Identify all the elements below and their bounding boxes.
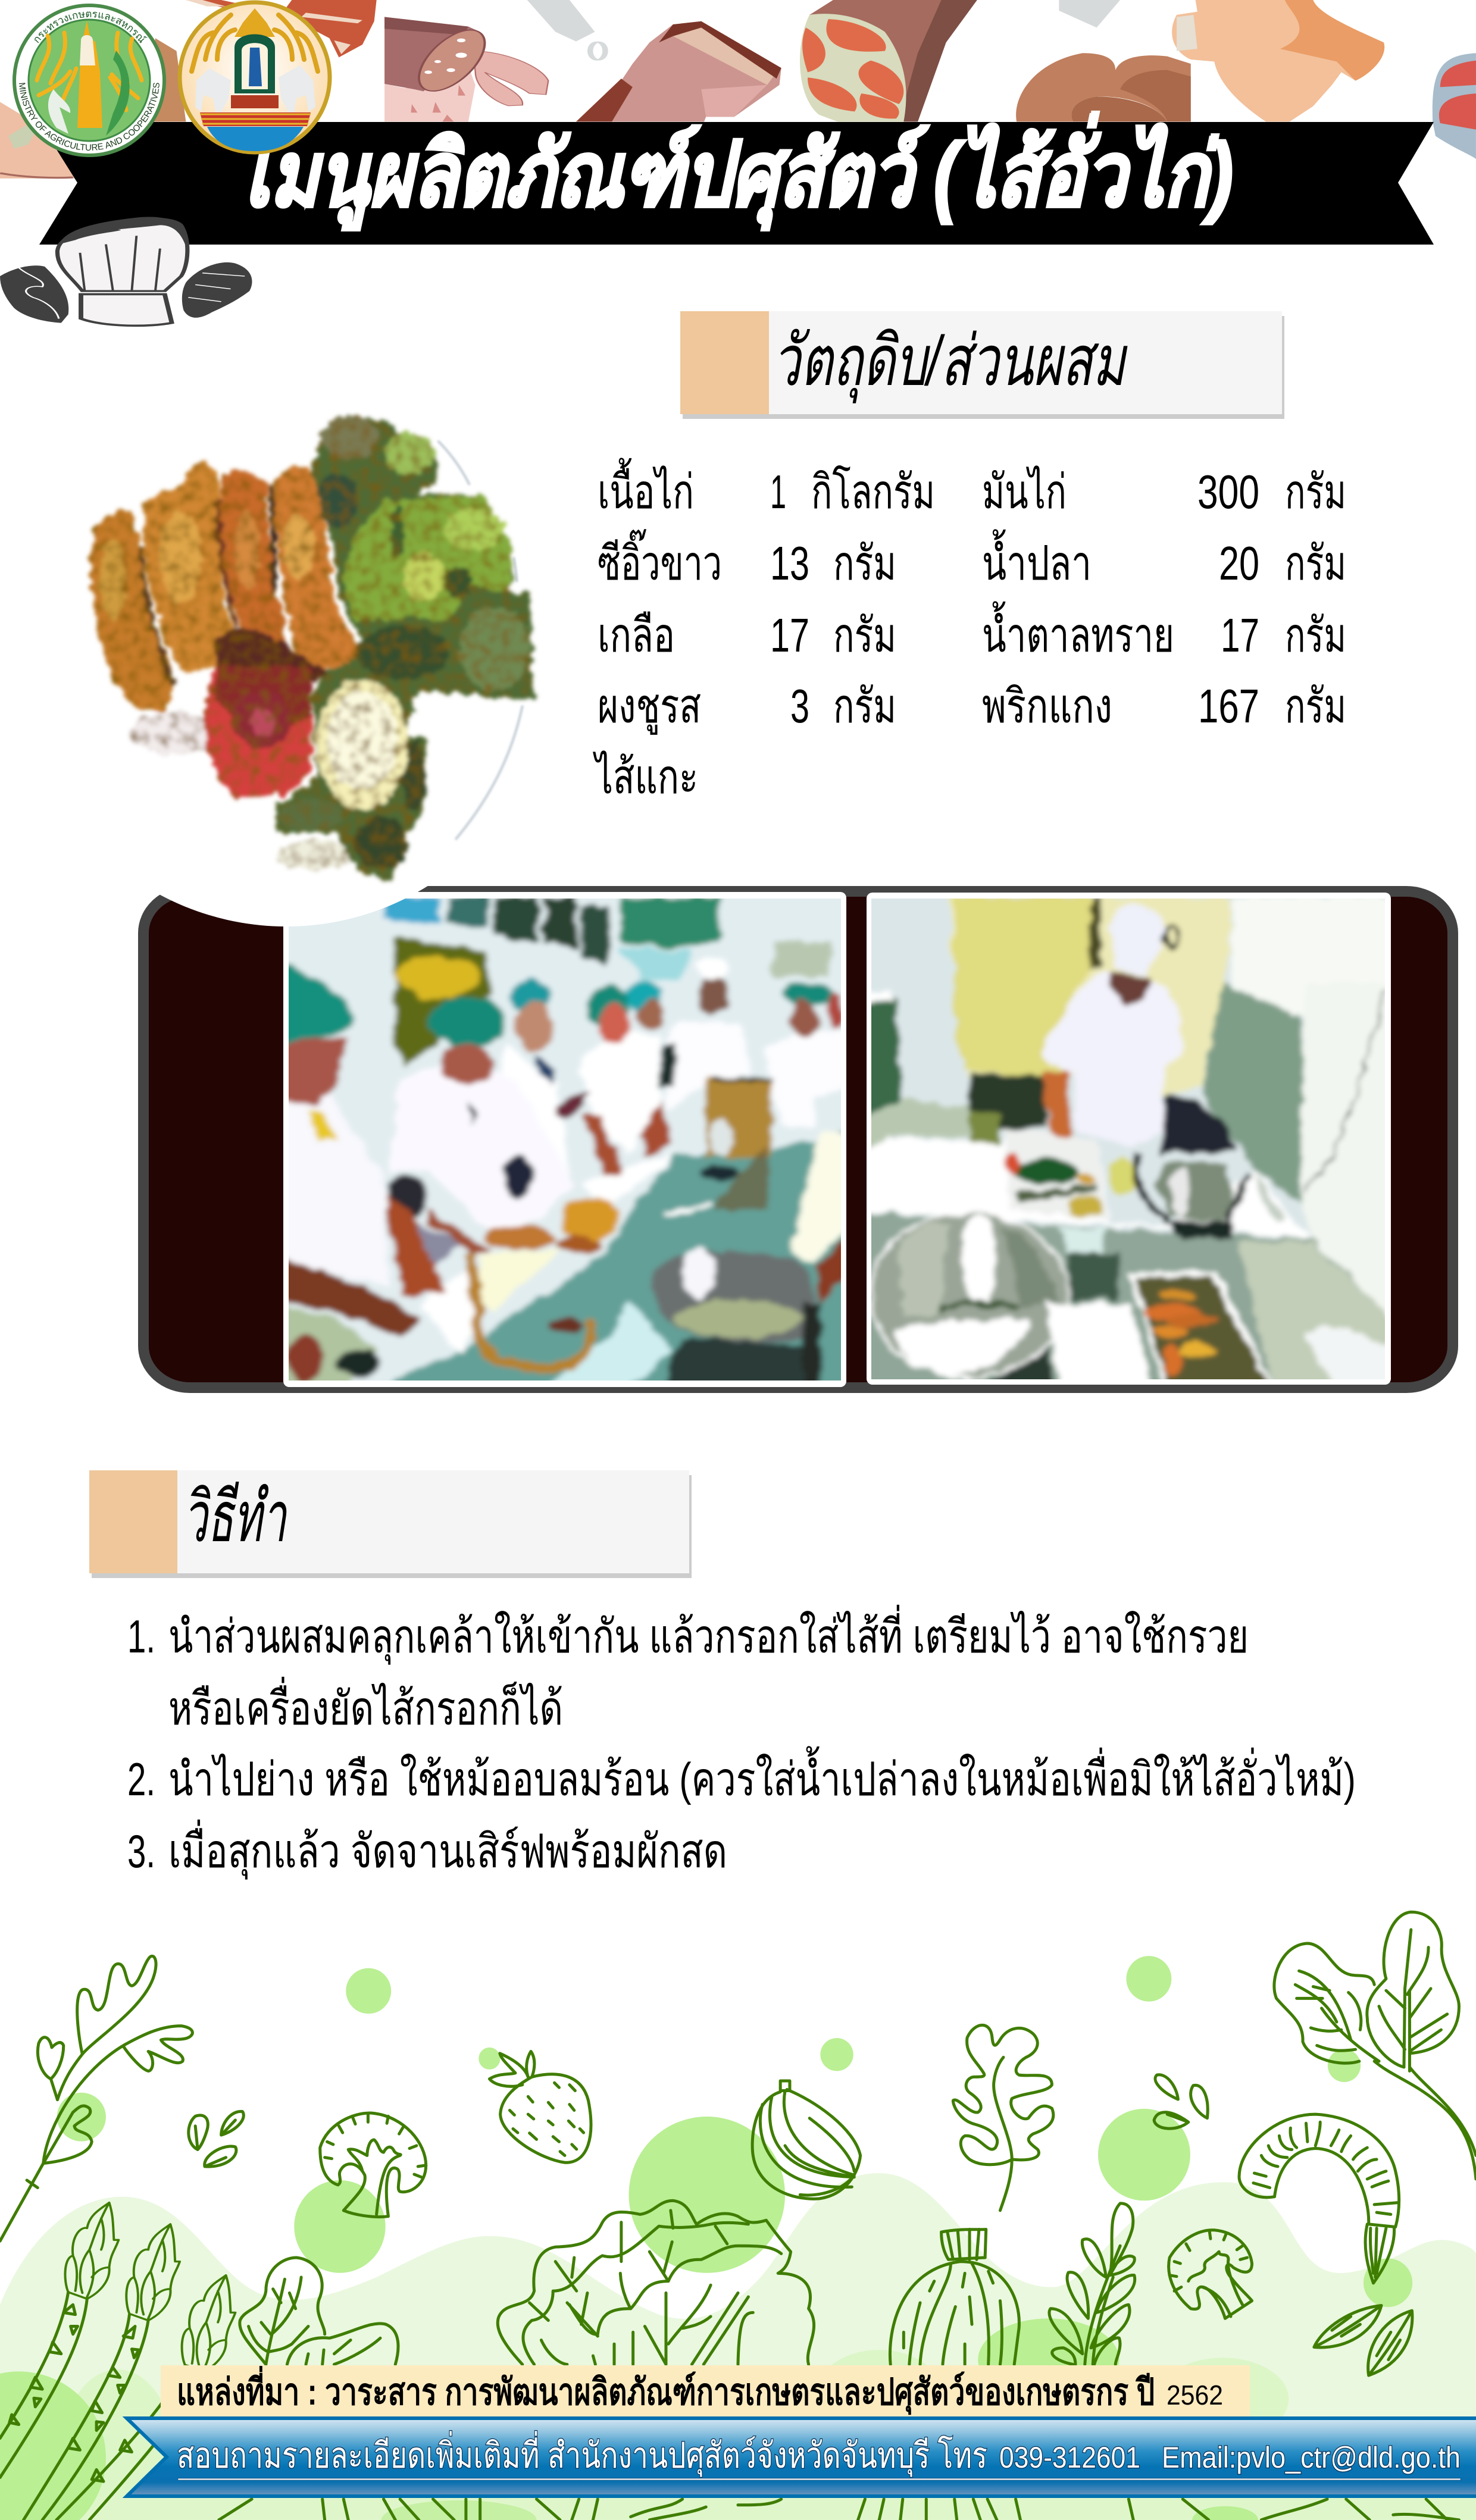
ingredients list: ผงชูรส bbox=[598, 680, 701, 735]
illustration: chicken leg bbox=[1172, 0, 1384, 122]
ingredients list: ไส้แกะ bbox=[593, 750, 698, 803]
person 2 bbox=[389, 1061, 575, 1238]
contact ribbon: 039-312601 bbox=[999, 2441, 1140, 2474]
icon: three small leaves left bbox=[189, 2111, 243, 2167]
illustration: ham bbox=[576, 21, 781, 122]
icon: right steak bbox=[182, 262, 252, 318]
illustration: vegetable line-art background bbox=[0, 1912, 1476, 2520]
ingredients list: เนื้อไก่ bbox=[598, 458, 694, 518]
method steps: 2. bbox=[127, 1753, 155, 1805]
person 4 bbox=[578, 1032, 662, 1154]
ingredients list: กรัม bbox=[833, 609, 896, 662]
ingredients list: 300 bbox=[1197, 465, 1259, 518]
ingredients list: 167 bbox=[1198, 680, 1259, 732]
ingredients list: กรัม bbox=[1285, 537, 1346, 590]
pot bbox=[1160, 1096, 1239, 1154]
icon: mushroom bbox=[320, 2113, 426, 2217]
illustration: pale meat behind logos bbox=[0, 0, 377, 179]
icon: large spinach top right bbox=[1274, 1912, 1476, 2179]
illustration: grey cutlery fragments bbox=[527, 0, 1120, 60]
illustration: cut of meat bbox=[800, 0, 977, 122]
icon: melon bbox=[890, 2229, 1019, 2365]
top meat illustration strip bbox=[0, 0, 1476, 179]
person 3 bbox=[500, 1044, 570, 1170]
method steps: 3. bbox=[127, 1825, 155, 1877]
icon: mushroom right bbox=[1169, 2230, 1252, 2318]
icon: herb sprig left bbox=[0, 1956, 192, 2241]
ingredients list: 1 bbox=[770, 465, 786, 518]
pale green hills bbox=[0, 2173, 1476, 2520]
ingredients list: กรัม bbox=[1285, 609, 1346, 662]
ingredients list: 3 bbox=[790, 680, 809, 732]
heading: ingredients: วัตถุดิบ/ส่วนผสม bbox=[773, 322, 1128, 403]
photo: cook with pot and bowl bbox=[849, 877, 1409, 1400]
plate rim bbox=[438, 441, 523, 840]
steel bowl bbox=[664, 1334, 810, 1380]
sausages bbox=[90, 509, 172, 712]
icon: onion bbox=[752, 2081, 861, 2199]
method steps: หรือเครื่องยัดไส้กรอกก็ได้ bbox=[168, 1677, 563, 1735]
contact ribbon: สอบถามรายละเอียดเพิ่มเติมที่ สำนักงานปศุสัตว์จังหวัดจันทบุรี โทร bbox=[177, 2431, 987, 2477]
photo: group preparing sausage bbox=[283, 892, 846, 1387]
ingredients list: กรัม bbox=[1285, 465, 1346, 518]
method steps bbox=[127, 1605, 1356, 1880]
source credit box: แหล่งที่มา : วาระสาร การพัฒนาผลิตภัณฑ์การเกษตรและปศุสัตว์ของเกษตรกร ปี bbox=[177, 2366, 1155, 2415]
ingredients list: เกลือ bbox=[598, 609, 675, 662]
egg bbox=[316, 679, 408, 809]
panel: dark photo frame bbox=[143, 877, 1453, 1400]
icon: strawberry bbox=[489, 2052, 591, 2162]
icon: three small leaves right bbox=[1154, 2075, 1208, 2128]
method steps: เมื่อสุกแล้ว จัดจานเสิร์ฟพร้อมผักสด bbox=[168, 1820, 727, 1880]
tomato rose bbox=[204, 666, 311, 798]
ingredients list: น้ำปลา bbox=[982, 529, 1092, 590]
ingredients list: กรัม bbox=[833, 680, 896, 732]
tray and vegetables bbox=[1003, 1127, 1107, 1219]
sausages bbox=[560, 1196, 618, 1241]
ingredients list: มันไก่ bbox=[982, 465, 1067, 518]
icon: lettuce bbox=[498, 2200, 814, 2365]
soft green blobs bbox=[0, 1956, 1476, 2520]
icon: hat bbox=[57, 217, 188, 325]
logo: Department of Livestock Development seal bbox=[180, 2, 330, 152]
person 5 bbox=[624, 980, 661, 1009]
sausage tray bbox=[1128, 1270, 1273, 1390]
method steps: 1. bbox=[127, 1610, 155, 1663]
person 1 bbox=[289, 1094, 390, 1286]
heading: method: วิธีทำ bbox=[183, 1478, 287, 1557]
icon: herb sprig right bbox=[1049, 2203, 1135, 2365]
ingredients list: พริกแกง bbox=[982, 680, 1112, 732]
ingredients list: ซีอิ๊วขาว bbox=[598, 529, 722, 590]
icon: two leaves right bbox=[1314, 2306, 1412, 2375]
illustration: sausages bbox=[1016, 53, 1191, 122]
heading: ingredients bbox=[680, 311, 1284, 419]
ingredients list: กิโลกรัม bbox=[811, 465, 935, 518]
source credit box bbox=[161, 2365, 1250, 2419]
cook bbox=[1040, 971, 1184, 1148]
icon: shrimp bbox=[1239, 2114, 1399, 2283]
ingredients list: 20 bbox=[1219, 537, 1259, 590]
steel bowl bbox=[983, 1338, 1054, 1390]
contact ribbon bbox=[127, 2418, 1476, 2496]
icon: left steak bbox=[0, 265, 68, 323]
table bbox=[364, 1132, 848, 1390]
background staff bbox=[666, 1022, 750, 1112]
icon: spinach leaves left bbox=[240, 2258, 398, 2365]
ingredients list: กรัม bbox=[833, 537, 896, 590]
logo: Ministry of Agriculture and Cooperatives bbox=[12, 4, 166, 157]
logo: Ministry of Agriculture and Cooperatives: MINISTRY OF AGRICULTURE AND COOPERATIVES bbox=[19, 83, 160, 151]
ingredients list: 17 bbox=[1221, 609, 1259, 662]
title banner bbox=[39, 112, 1434, 245]
ingredients list: กรัม bbox=[1285, 680, 1346, 732]
icon: oak leaf bbox=[953, 2025, 1053, 2211]
white table sheet bbox=[849, 1128, 1309, 1238]
photo: sausage plate bbox=[19, 392, 554, 926]
icon: chef hat with steaks bbox=[0, 217, 252, 325]
source credit box: 2562 bbox=[1167, 2380, 1223, 2411]
illustration: right edge meat bbox=[1433, 53, 1476, 159]
title text: เมนูผลิตภัณฑ์ปศุสัตว์ (ไส้อั่วไก่) bbox=[245, 112, 1233, 230]
ingredients list: 17 bbox=[770, 609, 809, 662]
heading: method bbox=[89, 1470, 692, 1578]
ingredients list: 13 bbox=[770, 537, 809, 590]
icon: vegetable stems below ribbon bbox=[219, 2385, 1459, 2520]
icon: asparagus bbox=[0, 2203, 235, 2520]
logo: Ministry of Agriculture and Cooperatives: กระทรวงเกษตรและสหกรณ์ bbox=[35, 11, 148, 43]
ingredients list bbox=[593, 458, 1346, 803]
steel table bbox=[849, 1209, 1396, 1390]
illustration: salami and pink sausage bbox=[384, 17, 548, 122]
ingredients list: น้ำตาลทราย bbox=[982, 601, 1174, 662]
